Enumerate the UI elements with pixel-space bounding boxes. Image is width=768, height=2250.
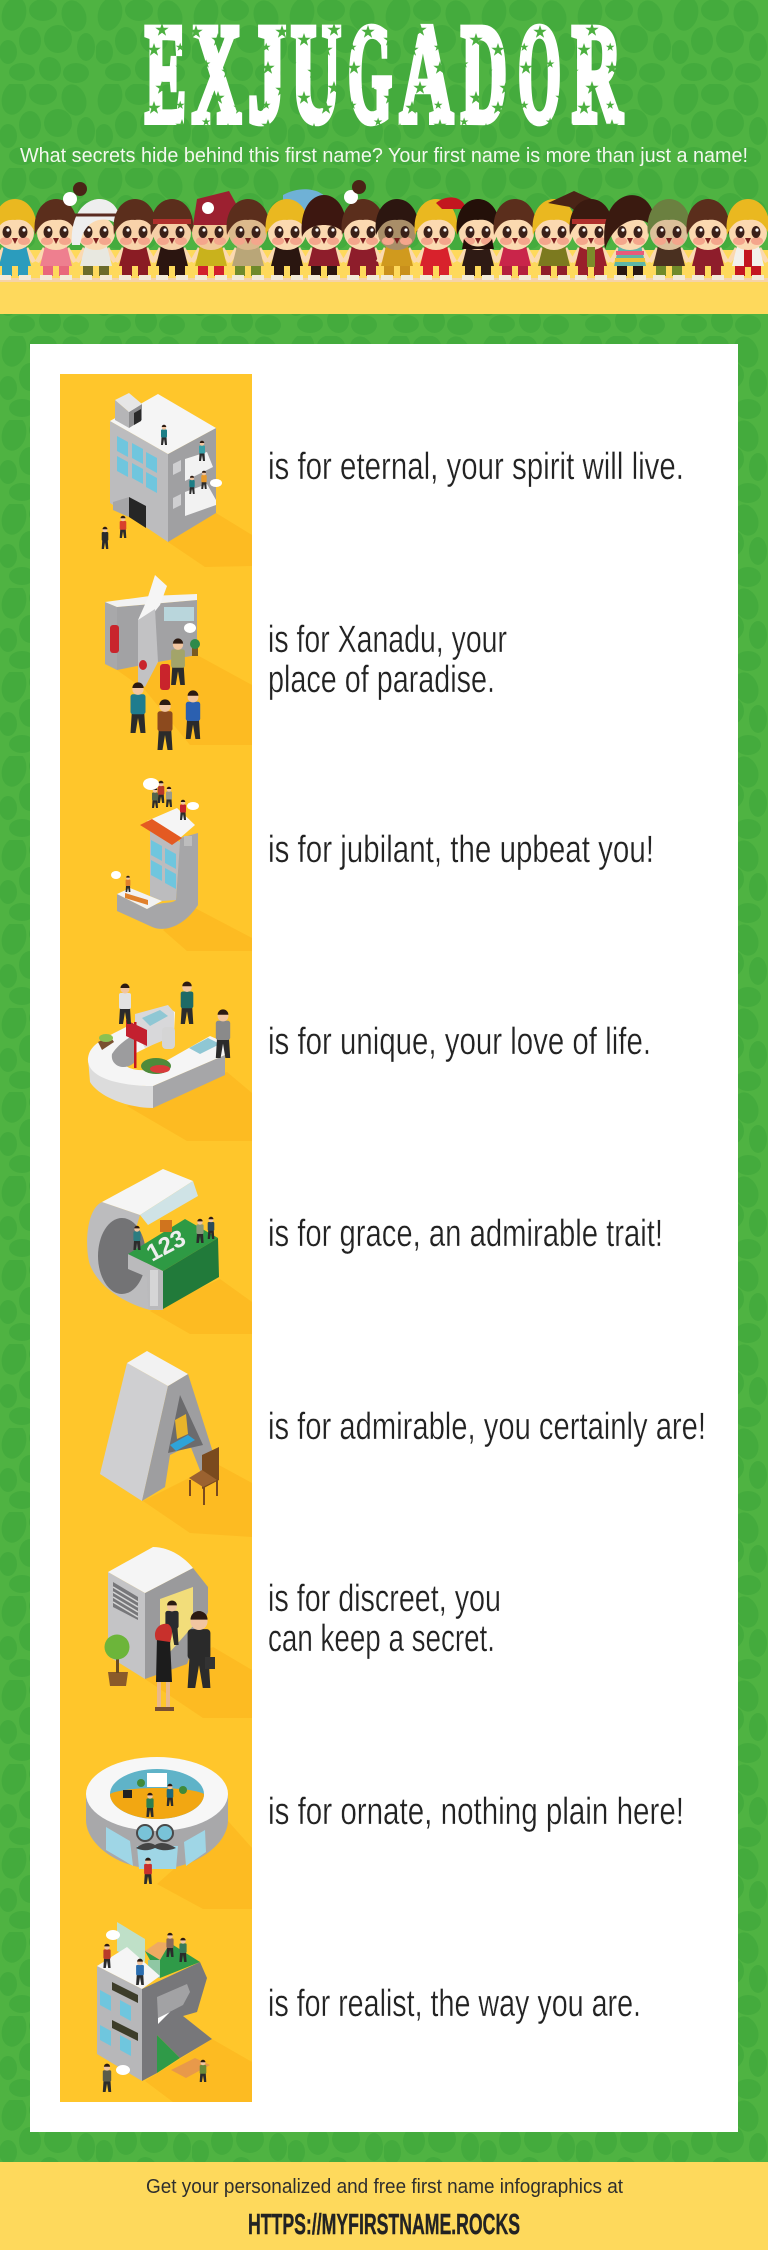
footer url: HTTPS://MYFIRSTNAME.ROCKS — [248, 2209, 520, 2241]
panel: yellow illustration column — [60, 374, 252, 2102]
title: D — [461, 0, 507, 152]
footer text: Get your personalized and free first name infographics at — [146, 2176, 623, 2198]
icon: letter J building — [111, 778, 252, 951]
text: letter D: is for discreet, you — [268, 1578, 501, 1620]
title — [145, 0, 623, 152]
text: letter R: is for realist, the way you are. — [268, 1983, 641, 2025]
icon: letter O building — [86, 1757, 252, 1909]
title: O — [518, 0, 561, 152]
icon: letter G building — [87, 1169, 252, 1334]
icon: letter A building — [100, 1351, 252, 1537]
banner: yellow band — [0, 250, 768, 314]
text: letter U: is for unique, your love of life. — [268, 1021, 651, 1063]
text: letter X — [268, 619, 507, 701]
text: letter D: can keep a secret. — [268, 1618, 495, 1660]
icon: letter U counter — [88, 981, 252, 1141]
icon: letter E building — [102, 393, 252, 567]
icon: letter D building — [104, 1547, 252, 1718]
title: G — [348, 0, 392, 152]
footer band — [0, 2162, 768, 2250]
icon: letter R building — [97, 1922, 252, 2102]
title: X — [192, 0, 241, 152]
text: letter X: is for Xanadu, your — [268, 619, 507, 661]
panel: white content panel — [30, 344, 738, 2132]
icon: letter X building — [105, 575, 252, 750]
text: letter X: place of paradise. — [268, 659, 495, 701]
title: A — [400, 0, 453, 152]
title: U — [291, 0, 341, 152]
title: R — [572, 0, 623, 152]
title: E — [145, 0, 186, 152]
icon: letter G building: 123 — [142, 1225, 190, 1267]
subtitle: What secrets hide behind this first name? Your first name is more than just a name! — [20, 145, 748, 167]
banner: row of cartoon characters — [0, 180, 768, 280]
text: letter J: is for jubilant, the upbeat you! — [268, 829, 654, 871]
text: letter G: is for grace, an admirable trait! — [268, 1213, 663, 1255]
text: letter D — [268, 1578, 501, 1660]
title: J — [248, 0, 286, 152]
